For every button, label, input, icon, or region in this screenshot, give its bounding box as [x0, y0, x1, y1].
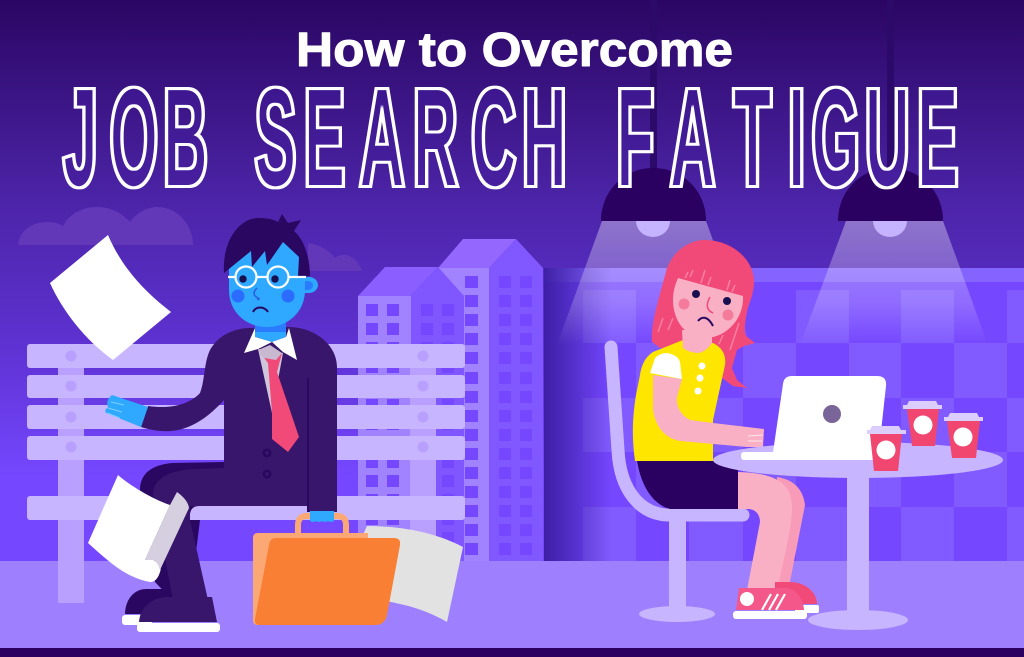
neck shadow — [255, 322, 286, 332]
lamp cords — [650, 0, 894, 170]
mouth — [698, 318, 713, 326]
jacket — [141, 327, 337, 512]
ear — [303, 277, 318, 293]
glasses — [228, 266, 306, 288]
hair — [224, 214, 310, 276]
skirt — [637, 461, 738, 509]
coffee cup 2 — [903, 401, 942, 446]
short building — [358, 267, 464, 561]
chair — [611, 347, 743, 622]
bench gap under thigh — [190, 506, 308, 520]
man — [88, 214, 337, 632]
floor — [0, 561, 1024, 648]
face — [229, 236, 305, 327]
collar — [244, 328, 297, 360]
face — [673, 278, 743, 338]
shoes — [733, 582, 819, 619]
lamp shades — [601, 168, 943, 221]
arm — [653, 375, 764, 447]
sleeve — [650, 353, 682, 379]
cheeks — [678, 298, 734, 320]
tall building — [438, 239, 543, 561]
back wall with checker pattern — [544, 268, 1024, 561]
eyes — [692, 290, 731, 305]
rear shoe — [122, 589, 176, 625]
top — [633, 340, 725, 461]
front leg — [738, 472, 792, 593]
jacket buttons — [264, 450, 270, 477]
low paper — [88, 475, 189, 582]
laptop — [741, 376, 886, 460]
hair strands — [658, 270, 739, 350]
left hand — [105, 395, 148, 427]
hair — [652, 240, 755, 388]
light beams — [557, 221, 988, 345]
mouth — [253, 308, 268, 312]
jacket seam — [307, 378, 309, 512]
tie — [258, 345, 299, 452]
lamps — [557, 0, 988, 345]
woman — [611, 240, 819, 622]
flying paper — [50, 235, 171, 360]
nose — [254, 288, 259, 299]
briefcase — [253, 511, 463, 625]
subtitle: How to Overcome: How to Overcome — [296, 24, 733, 77]
neck — [255, 320, 286, 342]
front shoe — [137, 597, 220, 632]
fingers — [748, 435, 763, 441]
clouds — [18, 207, 362, 271]
rear leg — [775, 477, 805, 592]
coffee cup 3 — [944, 413, 983, 458]
neck — [682, 330, 712, 353]
title — [63, 24, 958, 215]
blouse buttons — [694, 362, 706, 394]
shirt — [258, 349, 283, 413]
rear leg — [140, 462, 225, 600]
cheeks — [232, 290, 294, 302]
eyes — [239, 275, 279, 283]
bench — [27, 344, 465, 603]
bottom band — [0, 648, 1024, 657]
front leg — [153, 440, 310, 600]
hand on handle — [310, 511, 334, 522]
main title: Job Search Fatigue: JOB SEARCH FATIGUE — [63, 60, 958, 215]
coffee cup 1 — [867, 426, 906, 471]
paper behind briefcase — [362, 526, 463, 622]
bulbs — [636, 221, 907, 237]
cafe table — [713, 442, 1003, 630]
nose — [707, 297, 713, 313]
